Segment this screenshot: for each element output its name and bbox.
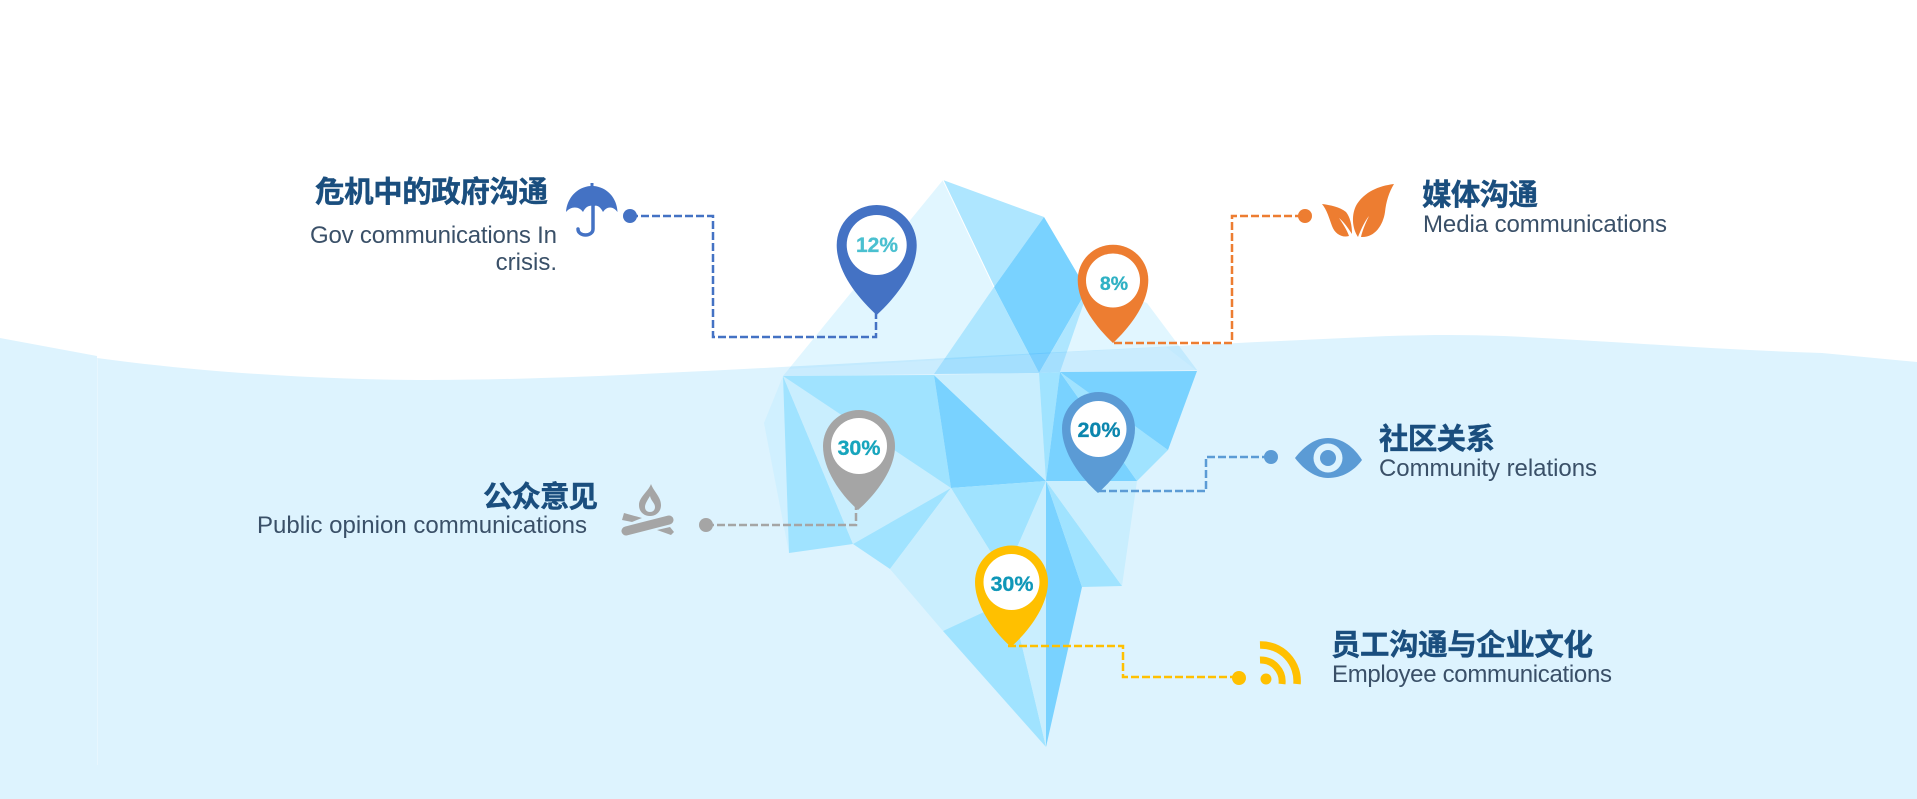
text: employee xyxy=(1331,629,1612,688)
pin: 8%: 8% xyxy=(1100,273,1128,295)
connector: employee xyxy=(1008,646,1246,685)
text: government xyxy=(310,176,557,276)
connector: government xyxy=(623,209,876,337)
text: government: Gov communications In xyxy=(310,222,557,249)
pin: 30% public opinion xyxy=(823,410,895,510)
icon: signal xyxy=(1260,645,1297,684)
pin: 20% xyxy=(1062,392,1135,493)
text: government: 危机中的政府沟通 xyxy=(315,176,548,209)
connector: media xyxy=(1114,209,1312,343)
iceberg above water xyxy=(783,180,1197,376)
text: public opinion: 公众意见 xyxy=(483,481,598,514)
text: public opinion: Public opinion communications xyxy=(257,512,587,539)
text: media: 媒体沟通 xyxy=(1422,179,1538,212)
text: community xyxy=(1379,423,1597,482)
icon: eye xyxy=(1295,438,1362,478)
text: public opinion xyxy=(257,481,598,539)
icon: umbrella xyxy=(566,183,618,235)
iceberg below water xyxy=(764,371,1197,747)
pin: 30% public opinion: 30% xyxy=(837,436,881,460)
connector: community xyxy=(1098,450,1278,491)
pin: 12% xyxy=(837,205,917,315)
connector: public opinion xyxy=(699,507,856,532)
pin: 12%: 12% xyxy=(856,234,898,257)
text: media: Media communications xyxy=(1423,211,1667,238)
icon: campfire xyxy=(622,484,674,535)
water xyxy=(0,335,1917,799)
text: media xyxy=(1422,179,1667,238)
icon: leaves xyxy=(1322,184,1394,237)
text: community: Community relations xyxy=(1379,455,1597,482)
pin: 30% employee: 30% xyxy=(990,572,1034,596)
text: government: crisis. xyxy=(496,249,557,276)
pin: 30% employee xyxy=(975,546,1048,647)
text: employee: 员工沟通与企业文化 xyxy=(1331,629,1593,662)
text: employee: Employee communications xyxy=(1332,661,1612,688)
pin: 20%: 20% xyxy=(1077,418,1121,442)
pin: 8% xyxy=(1078,245,1148,343)
text: community: 社区关系 xyxy=(1379,423,1495,456)
